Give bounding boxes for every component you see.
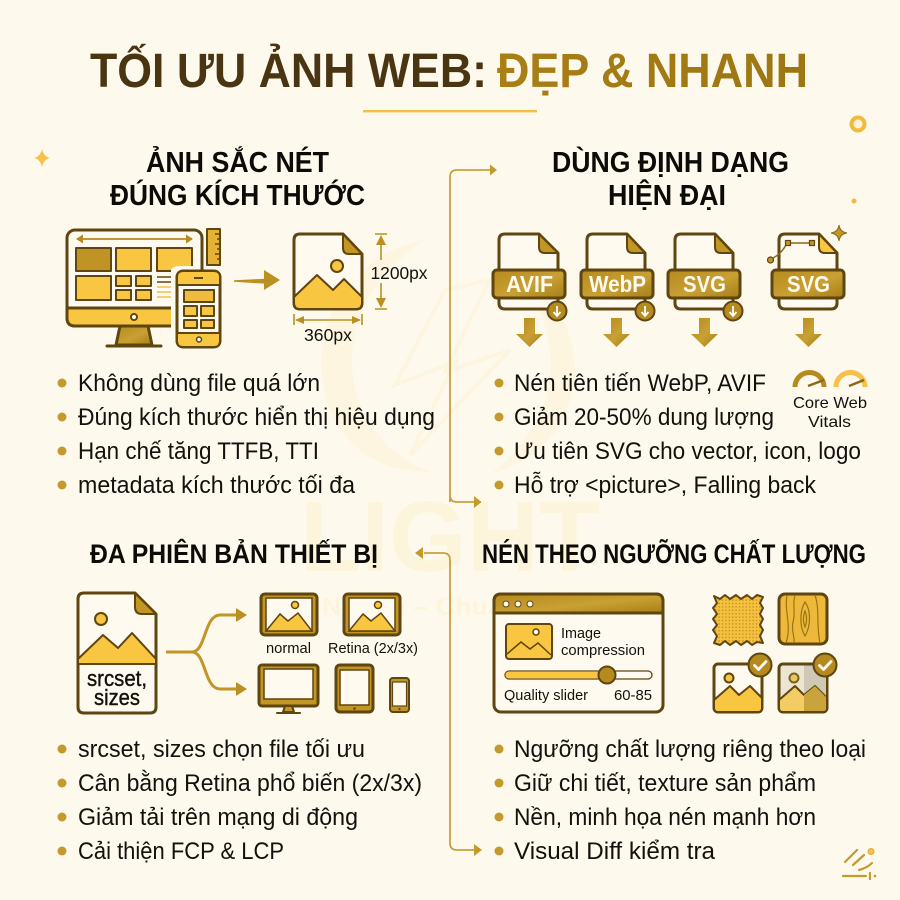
bullet list: modern formats: Ưu tiên SVG cho vector, icon, logo [514,438,861,465]
browser window: compression tool: 60-85 [614,687,652,704]
icon: resized image file [294,234,362,309]
panel: multi-device versions [58,539,422,865]
browser window: compression tool: Quality slider [504,687,588,704]
texture: fabric [713,595,763,645]
arrow: branching [166,608,247,696]
bullet list: modern formats: Giảm 20-50% dung lượng [514,404,774,431]
icon: ruler [207,229,220,265]
watermark logo: LIGHT [300,481,600,593]
icon: desktop monitor [67,230,202,346]
icon: srcset file: sizes [94,685,140,710]
bullet list: correct size: Hạn chế tăng TTFB, TTI [78,438,319,465]
bullet list: modern formats [494,370,861,499]
icon: retina image [328,594,418,657]
bullet list: correct size: Đúng kích thước hiển thị hiệu dụng [78,404,435,431]
heading: correct size [110,145,365,212]
bullet list: modern formats: Hỗ trợ <picture>, Falling back [514,472,817,499]
icon: tablet [336,665,373,712]
bullet list: multi-device: Giảm tải trên mạng di động [78,804,358,831]
icon: approved comparison image [779,654,836,712]
decoration: ring [852,118,864,130]
title: ĐẸP & NHANH [497,45,808,98]
icon: phone [171,266,220,347]
heading: correct size: ẢNH SẮC NÉT [146,145,329,179]
heading: multi-device versions: ĐA PHIÊN BẢN THIẾT BỊ [90,539,378,569]
icon: SVG vector file [768,225,847,347]
icon: WebP file [581,234,654,347]
title [90,43,808,98]
icon: desktop [259,665,318,713]
dimension: height: 1200px [370,263,428,283]
icon: AVIF file [493,234,566,347]
browser window: compression tool: compression [561,642,645,659]
title divider [363,110,537,112]
arrow: to file [234,270,280,290]
gauges: Core Web Vitals [793,372,867,431]
bullet list: modern formats: Nén tiên tiến WebP, AVIF [514,370,766,397]
browser window: compression tool [494,594,663,712]
icon: corner logo [843,848,876,879]
dimension: width: 360px [304,325,352,345]
bullet list: multi-device: srcset, sizes chọn file tối ưu [78,736,365,763]
bullet list: quality threshold [494,736,866,865]
browser window: compression tool: Image [561,625,601,642]
icon: approved image [714,654,772,712]
icon: srcset file [78,593,156,713]
bullet list: multi-device [58,736,422,865]
bullet list: correct size [58,370,435,499]
watermark logo [300,240,600,621]
dimension: height [370,234,428,309]
icon: normal image: normal [266,640,311,657]
icon: WebP file: WebP [589,271,646,297]
panel: quality threshold compression [482,539,866,865]
connector arrows [415,164,497,856]
bullet list: multi-device: Cân bằng Retina phổ biến (2x/3x) [78,770,422,797]
panel: correct size [58,145,435,499]
heading: correct size: ĐÚNG KÍCH THƯỚC [110,178,365,212]
bullet list: correct size: metadata kích thước tối đa [78,472,355,499]
icon: normal image [261,594,317,657]
bullet list: quality threshold: Giữ chi tiết, texture sản phẩm [514,770,816,797]
gauges: Core Web Vitals: Core Web [793,395,867,412]
icon: SVG vector file: SVG [787,271,830,297]
texture: wood [779,594,827,644]
panel: modern formats [493,145,867,499]
icon: SVG file [668,234,742,347]
bullet list: quality threshold: Ngưỡng chất lượng riêng theo loại [514,736,866,763]
icon: AVIF file: AVIF [506,271,553,297]
decoration: sparkle [34,149,50,167]
icon: srcset file: srcset, [87,666,147,691]
bullet list: quality threshold: Nền, minh họa nén mạnh hơn [514,804,816,831]
heading: modern formats: DÙNG ĐỊNH DẠNG [552,145,789,179]
bullet list: correct size: Không dùng file quá lớn [78,370,320,397]
icon: SVG file: SVG [683,271,726,297]
bullet list: quality threshold: Visual Diff kiểm tra [514,838,715,865]
decoration: dot [852,198,856,204]
icon: retina image: Retina (2x/3x) [328,640,418,657]
heading: modern formats [552,145,789,212]
icon: small phone [390,678,409,712]
heading: modern formats: HIỆN ĐẠI [608,178,726,212]
dimension: width [294,314,362,345]
gauges: Core Web Vitals: Vitals [808,414,851,431]
bullet list: multi-device: Cải thiện FCP & LCP [78,838,284,865]
title: TỐI ƯU ẢNH WEB: [90,43,487,98]
watermark logo: Nhanh – Chuẩn – Đẹp [322,593,600,621]
